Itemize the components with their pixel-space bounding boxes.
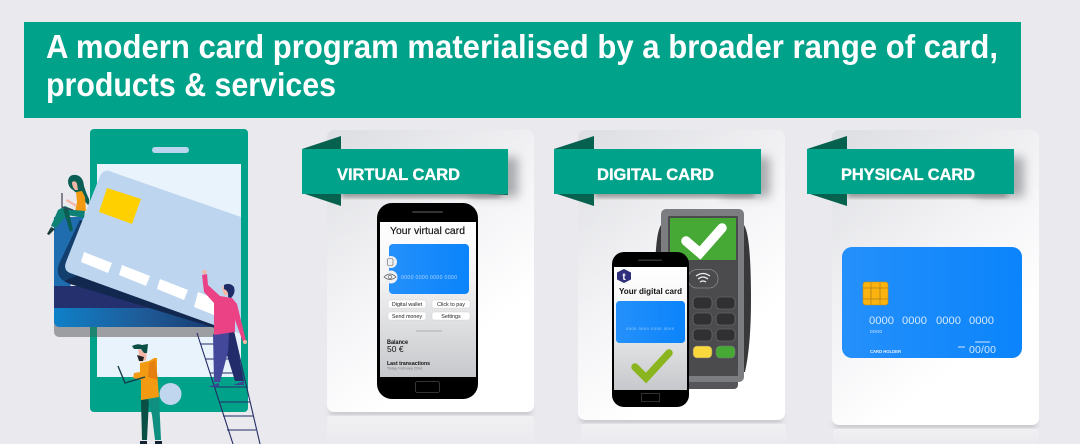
- title banner: [24, 22, 1021, 118]
- logo: [617, 269, 631, 283]
- ribbon: virtual card: [302, 136, 518, 206]
- person: man with laptop: [118, 344, 162, 444]
- front card: [65, 171, 241, 334]
- phone body: [90, 129, 248, 412]
- balance text: Balance: [387, 340, 409, 346]
- ladder: [197, 333, 260, 444]
- phone: digital card app: t: [622, 272, 626, 283]
- title text: A modern card program materialised by a broader range of card,: [46, 28, 998, 65]
- ribbon: digital card: [554, 136, 770, 206]
- action buttons: Digital wallet: [392, 302, 423, 308]
- physical credit card: 0000: [902, 315, 927, 327]
- phone: digital card app: [612, 252, 689, 407]
- virtual card graphic: [389, 244, 469, 294]
- title text: [46, 28, 998, 103]
- phone: digital card app: 0000 0000 0000 0000: [626, 327, 674, 331]
- ribbon: physical card: PHYSICAL CARD: [841, 166, 975, 184]
- panel: virtual card: [302, 130, 534, 444]
- panel: digital card: [554, 130, 786, 444]
- ribbon: digital card: DIGITAL CARD: [597, 166, 714, 184]
- action buttons: Settings: [441, 314, 461, 320]
- phone: digital card app: Your digital card: [619, 286, 682, 296]
- action buttons: [388, 300, 470, 320]
- physical credit card: 0000: [936, 315, 961, 327]
- title text: products & services: [46, 66, 336, 103]
- phone: virtual card app: 50 €: [387, 344, 404, 354]
- person: man in pink reaching up: [202, 270, 247, 387]
- phone: virtual card app: 0000 0000 0000 0000: [401, 275, 457, 281]
- action buttons: Click to pay: [437, 302, 465, 308]
- ribbon: physical card: [807, 136, 1024, 206]
- phone: virtual card app: Today, February 22nd: [387, 366, 422, 370]
- phone: virtual card app: Last transactions: [387, 361, 430, 367]
- ribbon: virtual card: VIRTUAL CARD: [337, 166, 460, 184]
- physical credit card: 0000: [869, 315, 894, 327]
- chip: [863, 282, 888, 305]
- physical credit card: 0000: [969, 315, 994, 327]
- physical credit card: [842, 247, 1022, 358]
- phone: virtual card app: [377, 203, 478, 399]
- payment terminal: [655, 209, 751, 389]
- physical credit card: CARD HOLDER: [870, 349, 902, 354]
- action buttons: Send money: [392, 314, 422, 320]
- illustration: phone with credit card and people: [47, 129, 260, 444]
- terminal keys: [693, 297, 735, 358]
- physical credit card: 00/00: [969, 344, 996, 356]
- person: woman with laptop: [47, 175, 89, 235]
- phone: virtual card app: Your virtual card: [390, 225, 465, 237]
- physical credit card: 0000: [870, 329, 882, 335]
- card shadow and back card: [54, 300, 216, 337]
- panel: physical card: [807, 130, 1039, 444]
